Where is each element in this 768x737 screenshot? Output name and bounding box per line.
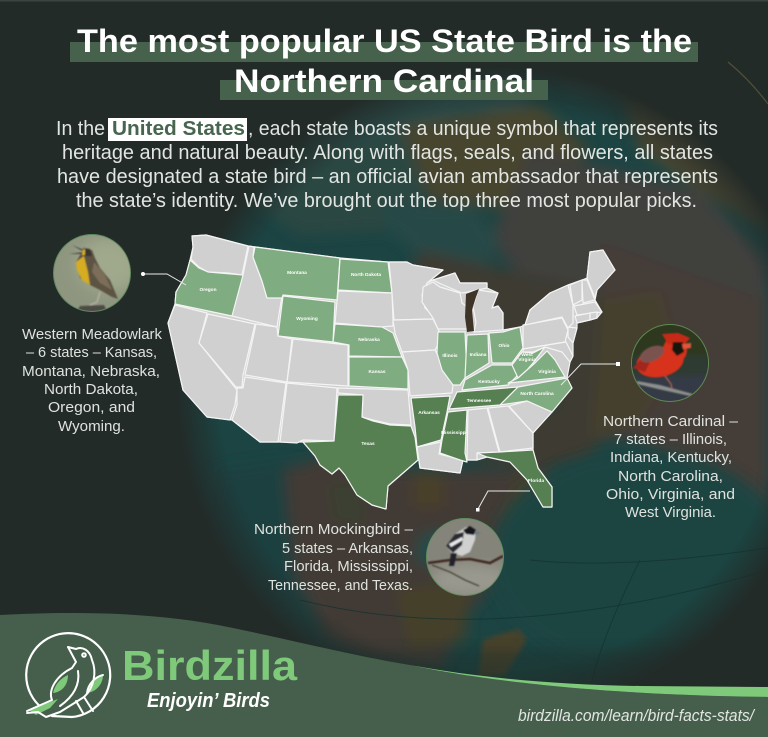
state name labels: Nebraska <box>358 337 380 343</box>
intro text block: , each state boasts a unique symbol that represents its <box>248 117 718 140</box>
logo icon: bird in circle <box>26 633 110 717</box>
United States highlight <box>108 118 247 141</box>
state name labels: West <box>521 352 533 358</box>
intro text block: have designated a state bird – an official avian ambassador that represents <box>57 165 718 188</box>
brand name: Birdzilla <box>122 642 298 689</box>
state name labels: Ohio <box>499 343 510 349</box>
title highlight line 2 <box>220 80 548 100</box>
state name labels: Virginia <box>538 369 556 375</box>
intro text block: heritage and natural beauty. Along with flags, seals, and flowers, all states <box>62 141 713 164</box>
caption: northern mockingbird: Northern Mockingbird – <box>254 521 414 538</box>
footer band <box>0 613 768 737</box>
caption: western meadowlark: Wyoming. <box>58 418 125 435</box>
callout line: cardinal <box>561 362 620 385</box>
caption: northern mockingbird: Florida, Mississippi, <box>284 558 413 575</box>
caption: northern cardinal: 7 states – Illinois, <box>614 431 727 448</box>
state name labels: Texas <box>361 441 375 447</box>
intro text block: In the <box>56 117 105 140</box>
state name labels: Mississippi <box>441 430 467 436</box>
state name labels: North Carolina <box>520 391 554 397</box>
callout line: mockingbird <box>476 491 530 512</box>
caption: northern cardinal: Indiana, Kentucky, <box>610 449 732 466</box>
caption: western meadowlark <box>22 326 162 435</box>
intro text block <box>56 117 718 212</box>
state shapes <box>168 235 615 509</box>
intro text block: United States <box>112 117 245 140</box>
caption: northern cardinal: Northern Cardinal – <box>603 413 739 430</box>
caption: northern mockingbird: 5 states – Arkansas, <box>282 540 413 557</box>
caption: western meadowlark: – 6 states – Kansas, <box>26 344 157 361</box>
caption: northern mockingbird: Tennessee, and Texas. <box>268 577 413 594</box>
state name labels: Oregon <box>199 287 217 293</box>
state name labels: Tennessee <box>467 398 492 404</box>
caption: western meadowlark: Montana, Nebraska, <box>22 363 160 380</box>
title <box>70 23 698 100</box>
globe photograph <box>190 78 768 682</box>
state name labels: Wyoming <box>296 316 318 322</box>
bird photo: western meadowlark <box>53 234 131 312</box>
faint globe grid lines <box>300 550 754 654</box>
state name labels: Kentucky <box>478 379 500 385</box>
caption: western meadowlark: Oregon, and <box>48 399 135 416</box>
callout line: meadowlark <box>141 272 186 285</box>
state name labels: Indiana <box>470 352 487 358</box>
title line 2: Northern Cardinal <box>234 63 534 99</box>
state name labels <box>199 270 556 484</box>
caption: northern cardinal: West Virginia. <box>625 504 716 521</box>
caption: northern cardinal: North Carolina, <box>618 468 723 485</box>
state name labels: North Dakota <box>351 272 381 278</box>
state name labels: Montana <box>287 270 307 276</box>
title highlight line 1 <box>70 42 698 62</box>
tagline: Enjoyin’ Birds <box>147 690 270 712</box>
caption: western meadowlark: North Dakota, <box>44 381 138 398</box>
map of US states <box>168 235 615 509</box>
state name labels: Illinois <box>442 353 458 359</box>
caption: northern mockingbird <box>254 521 414 594</box>
caption: northern cardinal: Ohio, Virginia, and <box>606 486 735 503</box>
state name labels: Virginia <box>518 357 536 363</box>
caption: northern cardinal <box>603 413 739 521</box>
footer light green accent <box>410 665 768 697</box>
globe stand arc <box>728 62 768 104</box>
title line 1: The most popular US State Bird is the <box>77 23 692 59</box>
caption: western meadowlark: Western Meadowlark <box>22 326 162 343</box>
bird photo: northern cardinal <box>630 323 710 405</box>
state name labels: Florida <box>528 478 544 484</box>
intro text block: the state’s identity. We’ve brought out the top three most popular picks. <box>76 189 697 212</box>
Lake Michigan <box>465 289 479 332</box>
bird photo: northern mockingbird <box>426 518 504 596</box>
state name labels: Arkansas <box>418 410 440 416</box>
state name labels: Kansas <box>368 369 386 375</box>
